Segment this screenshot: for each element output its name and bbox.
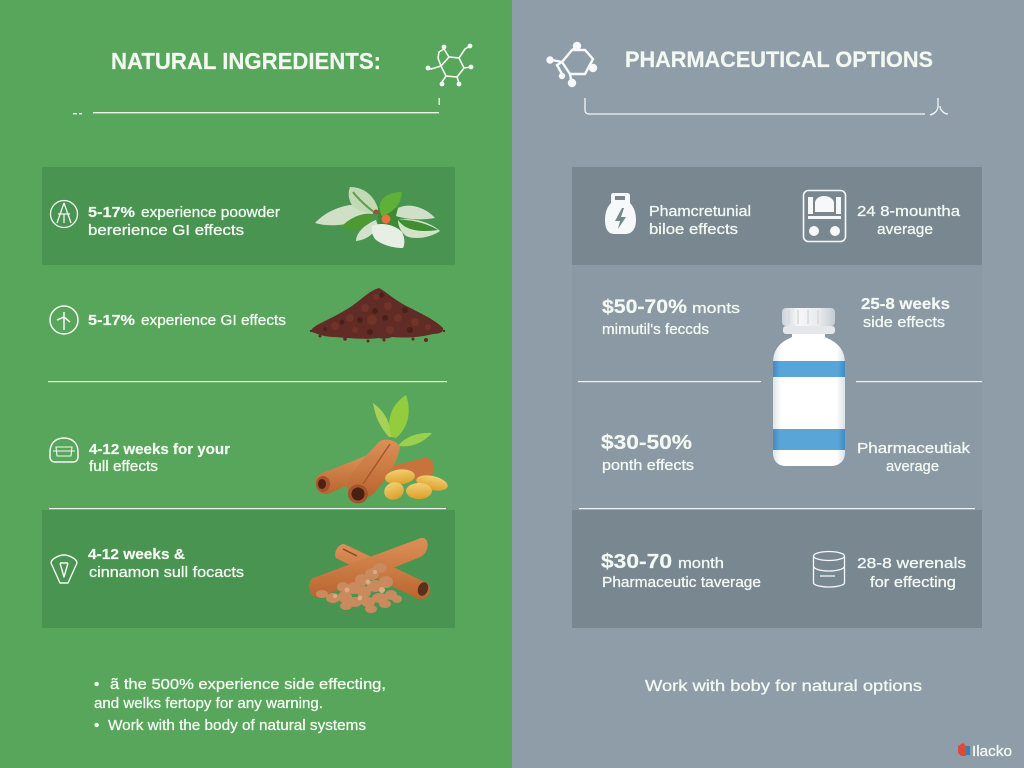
heading rule right	[585, 98, 948, 115]
panel: pharmaceutical options	[512, 0, 1024, 768]
text: cost upper: $50-70%	[602, 297, 687, 318]
text: bottom notes: •	[94, 717, 99, 734]
heading rule left	[73, 98, 440, 114]
icon: molecule right	[548, 43, 596, 86]
text: cost lower: $30-50%	[601, 432, 692, 454]
text: bottom pharma left: Pharmaceutic taverage	[602, 574, 761, 591]
text: bottom pharma right: for effecting	[870, 574, 956, 591]
text: pharmaceutical average: average	[886, 458, 939, 475]
icon: database cylinder	[814, 552, 844, 587]
text: bottom pharma left	[601, 551, 761, 591]
icon: compass	[50, 200, 78, 228]
text: pharmaceutical average	[857, 440, 971, 475]
row band: bottom pharma	[572, 510, 982, 628]
row band: middle pharma	[572, 265, 982, 510]
divider pharma lower	[579, 508, 975, 509]
text: weeks upper	[861, 296, 950, 331]
text: cost upper: monts	[692, 300, 740, 317]
text: cost lower: ponth effects	[602, 457, 694, 474]
icon: molecule left	[426, 44, 473, 86]
text: cost lower	[601, 432, 694, 474]
text: row three	[89, 441, 230, 475]
text: bottom notes: Work with the body of natural systems	[108, 717, 366, 734]
text: bottom note pharma: Work with boby for natural options	[645, 678, 922, 695]
text: cost upper	[602, 297, 740, 338]
divider pharma left	[578, 381, 761, 382]
text: bottom pharma left: month	[678, 555, 724, 572]
illustration: crossed cinnamon with seeds	[309, 538, 430, 613]
illustration: brown powder pile	[310, 288, 445, 342]
text: top pharma left: biloe effects	[649, 221, 738, 238]
text: cost upper: mimutil's feccds	[602, 321, 709, 338]
panel: natural ingredients	[0, 0, 512, 768]
text: row one: bererience GI effects	[88, 222, 244, 239]
text: top pharma left	[649, 203, 751, 238]
text: top pharma right	[857, 203, 961, 238]
illustration: leaves	[315, 187, 440, 248]
text: row one: 5-17%	[88, 204, 135, 221]
text: bottom notes: •	[94, 676, 99, 693]
text: top pharma right: average	[877, 221, 933, 238]
text: row two: experience GI effects	[141, 312, 286, 329]
icon: circled arrow	[50, 306, 78, 334]
row band: top pharma	[572, 167, 982, 265]
text: bottom pharma left: $30-70	[601, 551, 672, 573]
text: row four: 4-12 weeks &	[88, 546, 185, 563]
row divider one	[48, 381, 447, 382]
text: row three: full effects	[89, 458, 158, 475]
text: row four: cinnamon sull focacts	[89, 564, 244, 581]
icon: device	[804, 190, 846, 242]
text: bottom notes: and welks fertopy for any warning.	[94, 695, 323, 712]
text: top pharma right: 24 8-mountha	[857, 203, 961, 220]
text: bottom notes: ã the 500% experience side effecting,	[110, 676, 386, 693]
icon: gem pin	[51, 555, 77, 583]
row band: cinnamon seeds	[42, 510, 455, 628]
illustration: pill bottle	[773, 308, 845, 466]
heading: natural ingredients: NATURAL INGREDIENTS:	[111, 48, 381, 74]
text: row one	[88, 204, 280, 239]
icon: badge	[50, 438, 78, 462]
logo: watermark: Ilacko	[972, 743, 1012, 760]
row band: leaf	[42, 167, 455, 265]
text: top pharma left: Phamcretunial	[649, 203, 751, 220]
text: bottom pharma right: 28-8 werenals	[857, 555, 966, 572]
text: bottom pharma right	[857, 555, 966, 591]
text: weeks upper: side effects	[863, 314, 945, 331]
text: weeks upper: 25-8 weeks	[861, 296, 950, 313]
heading: pharmaceutical options: PHARMACEUTICAL OPTIONS	[625, 47, 933, 72]
text: row two: 5-17%	[88, 312, 135, 329]
icon: bag with lightning	[605, 193, 636, 234]
text: row one: experience poowder	[141, 204, 280, 221]
illustration: cinnamon sticks and capsules	[316, 395, 449, 504]
text: row four	[88, 546, 244, 581]
divider pharma right	[856, 381, 982, 382]
text: row three: 4-12 weeks for your	[89, 441, 230, 458]
text: bottom notes	[94, 676, 386, 734]
row divider two	[49, 508, 446, 509]
text: pharmaceutical average: Pharmaceutiak	[857, 440, 971, 457]
